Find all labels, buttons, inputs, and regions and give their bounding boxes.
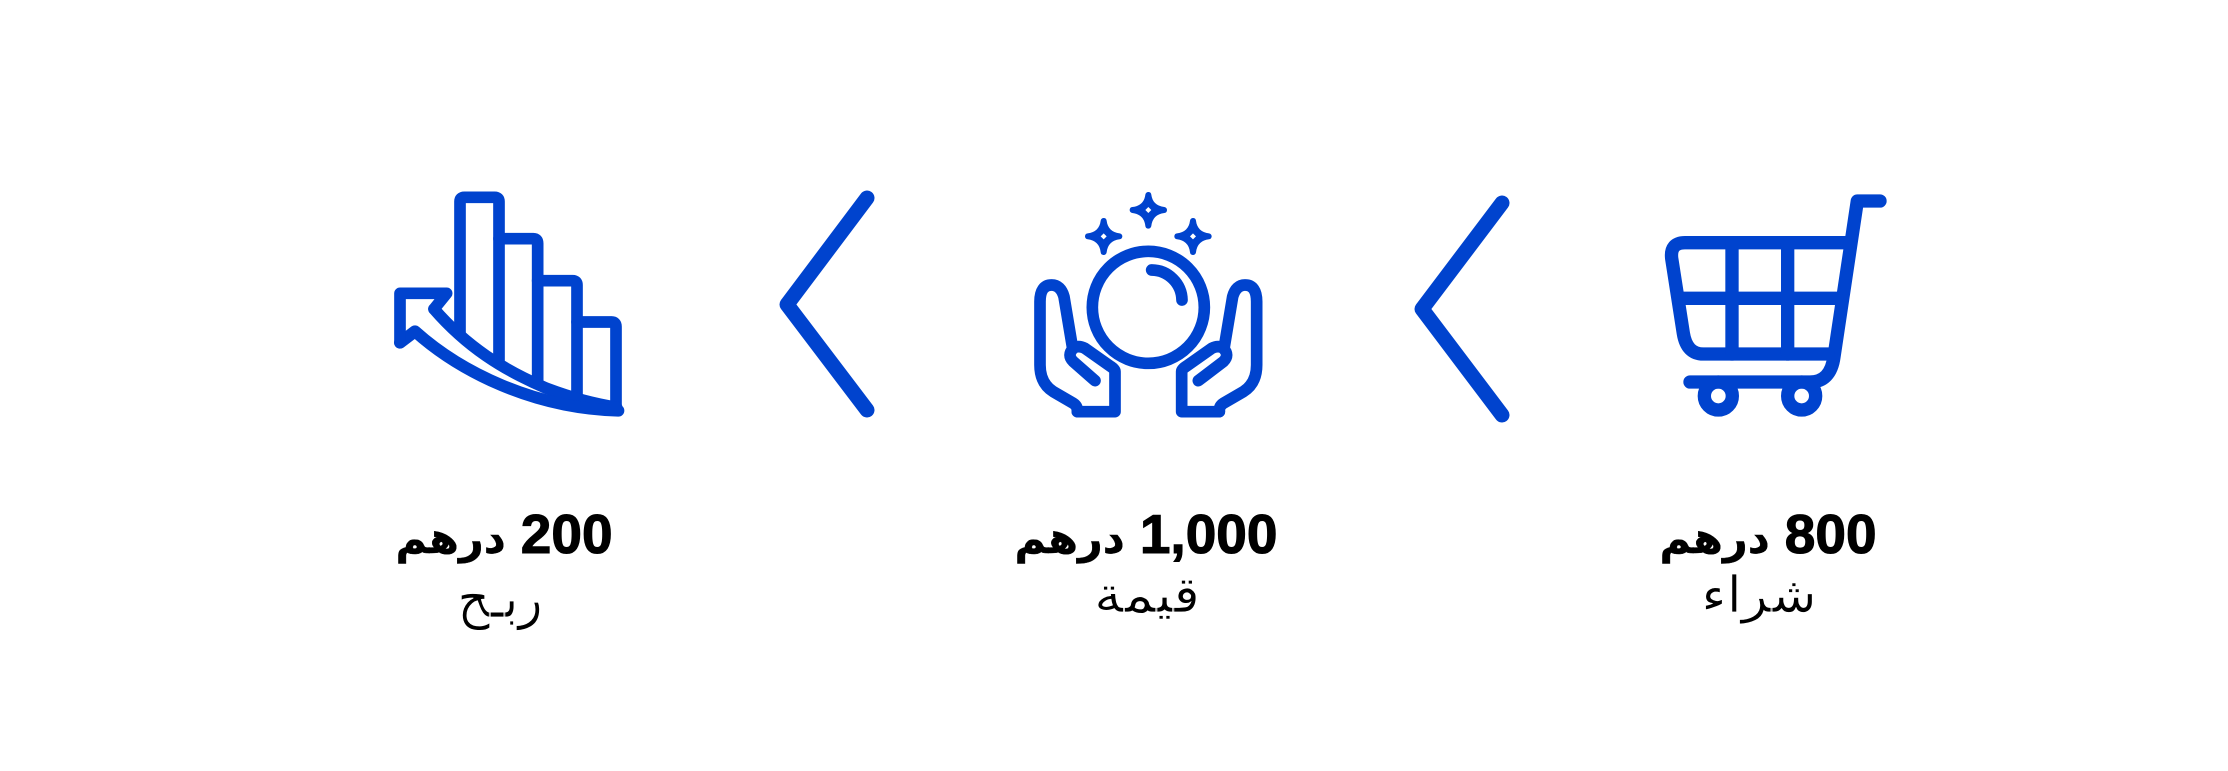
icon: hands holding crystal ball with sparkles [1040, 195, 1257, 412]
text: profit label: ربـح [458, 567, 542, 631]
text: purchase amount: 800 درهم [1659, 503, 1877, 565]
text: value amount: 1,000 درهم [1015, 503, 1277, 565]
text: value label: قيمة [1094, 566, 1200, 624]
text: profit amount: 200 درهم [395, 503, 613, 565]
text: purchase label: شراء [1701, 567, 1817, 624]
arrow: from purchase to value [1422, 203, 1502, 415]
icon: bar chart with profit arrow [400, 197, 618, 411]
icon: shopping cart [1671, 201, 1880, 410]
arrow: from value to profit [787, 198, 867, 410]
